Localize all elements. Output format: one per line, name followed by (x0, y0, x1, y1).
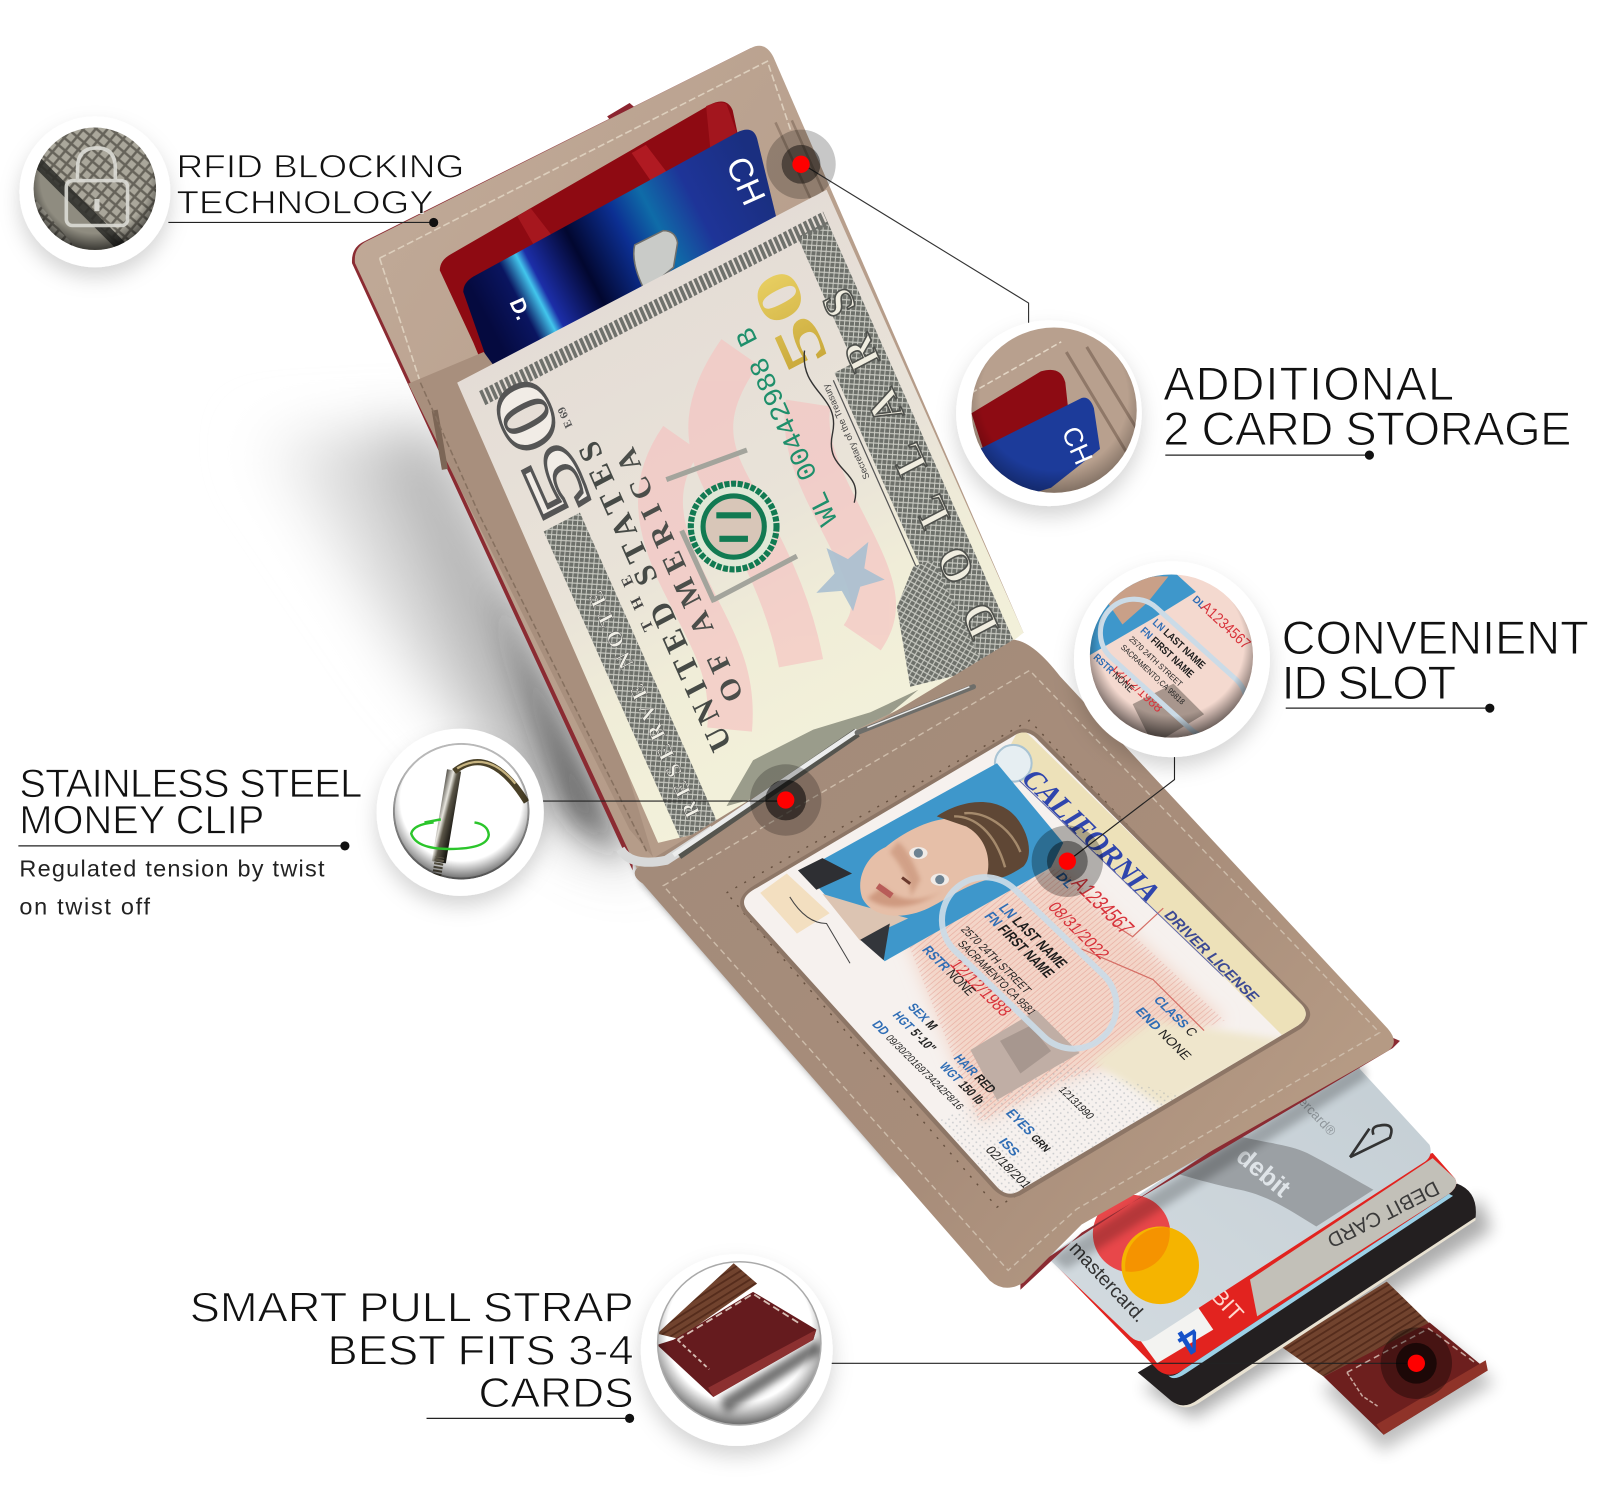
document number: DD 09/30/20169734242F8/16 (869, 1018, 969, 1112)
big corner numeral: 50 (473, 363, 608, 536)
swoosh (1177, 1135, 1373, 1227)
leader line (168, 218, 438, 227)
twist arrow (411, 822, 489, 849)
wallet: pull strap (1282, 1282, 1488, 1435)
badge (956, 320, 1143, 506)
portrait (798, 802, 1029, 960)
hotspot: money clip (750, 764, 821, 836)
first name: FN FIRST NAME (980, 910, 1058, 981)
heading line one: UNITED STATES (571, 435, 738, 758)
lower right tint (1092, 1020, 1291, 1107)
wallet: cards pulled out (1047, 1051, 1476, 1407)
weight: WGT 150 lb (936, 1060, 988, 1106)
mastercard logo (1093, 1195, 1170, 1272)
heading: SMART PULL STRAP (190, 1283, 634, 1330)
window rim (740, 729, 1310, 1198)
hotspot: ID slot (1032, 826, 1103, 897)
leader line (1066, 740, 1174, 862)
signature patch (760, 873, 830, 934)
heading: RFID BLOCKING (177, 148, 464, 185)
badge: DL (1190, 594, 1207, 611)
blue card (463, 130, 778, 373)
DL label: DL (1053, 870, 1078, 890)
cream top right band (1005, 727, 1316, 1041)
heading (1282, 612, 1589, 709)
lock icon (66, 148, 128, 226)
heading: MONEY CLIP (19, 799, 264, 843)
underline (427, 1414, 634, 1423)
debit card (1051, 1153, 1456, 1375)
debit word: debit (1231, 1142, 1296, 1203)
endorsement: END NONE (1132, 1005, 1195, 1062)
gold numeral: 50 (738, 258, 841, 383)
heading: CONVENIENT (1282, 612, 1589, 664)
hologram icon (1350, 1125, 1391, 1157)
heading: ID SLOT (1282, 657, 1456, 709)
wallet: top panel with card pockets (352, 46, 1023, 870)
right pockets (776, 120, 847, 245)
red card (440, 102, 760, 378)
pink area (898, 867, 1224, 1122)
engraved left band (544, 513, 719, 845)
network fragment: ercard® (1296, 1094, 1339, 1139)
badge: 2570 24TH STREET (1127, 635, 1184, 689)
outer stitching (663, 670, 1380, 1270)
visa patch (1140, 1307, 1213, 1363)
class: CLASS C (1151, 994, 1201, 1039)
engraved right band (834, 348, 1014, 660)
city: SACRAMENTO,CA 95818 (955, 939, 1042, 1021)
wallet: ID card in window (744, 732, 1306, 1194)
callout: smart pull strap (190, 1254, 1416, 1446)
lower pocket flap beside bill (408, 352, 653, 857)
licence number: A1234567 (1066, 873, 1140, 938)
heading: ADDITIONAL (1163, 358, 1454, 410)
heading: CARDS (479, 1369, 634, 1416)
description: Regulated tension by twist (19, 856, 325, 882)
badge (641, 1254, 833, 1446)
badge (377, 729, 544, 896)
hair colour: HAIR RED (951, 1052, 1000, 1095)
callout: additional card storage (801, 163, 1571, 506)
star (816, 542, 885, 611)
serial number: WL 00442988 B (732, 321, 845, 530)
right portrait engraving (897, 560, 985, 687)
badge: 12/12/1988 (1108, 660, 1166, 715)
treasury caption: Secretary of the Treasury (821, 382, 872, 481)
ghost photo (970, 1010, 1080, 1100)
wallet drop shadow (255, 429, 1495, 1451)
heading: BEST FITS 3-4 (328, 1326, 634, 1373)
callout: convenient ID slot (1066, 561, 1589, 862)
card text D.: D. (505, 294, 535, 324)
heading (177, 148, 464, 220)
debit card caption: DEBIT CARD (1323, 1176, 1442, 1251)
heading: STAINLESS STEEL (19, 762, 362, 806)
callout: RFID blocking technology (19, 116, 464, 267)
badge (19, 116, 170, 267)
heading (190, 1283, 634, 1416)
red map line (1082, 908, 1204, 1031)
dollars lettering: DOLLARS (813, 280, 1008, 646)
band lettering: RESERVE NOTE (584, 587, 704, 822)
issue label: ISS (995, 1136, 1023, 1158)
heading (1163, 358, 1571, 455)
card text CH: CH (718, 151, 772, 211)
seal (995, 745, 1032, 782)
height: HGT 5'-10" (889, 1009, 940, 1054)
state name: CALIFORNIA (1013, 764, 1169, 907)
money clip (620, 687, 973, 862)
last name: LN LAST NAME (995, 901, 1071, 971)
wallet: lower panel (635, 640, 1400, 1290)
stitching (380, 61, 791, 383)
badge: FN FIRST NAME (1138, 625, 1196, 680)
sex: SEX M (905, 1001, 941, 1032)
the: THE (618, 572, 657, 634)
badge: RSTR NONE (1091, 652, 1136, 695)
description: on twist off (19, 893, 150, 919)
underline (1165, 451, 1374, 460)
callout: stainless steel money clip (18, 729, 786, 919)
black card (1138, 1184, 1476, 1405)
blue letter: 4 (1170, 1318, 1209, 1364)
badge: CH (1056, 422, 1099, 469)
underline (18, 841, 349, 851)
hotspot: card storage (766, 130, 836, 199)
heading (19, 762, 362, 843)
badge (1074, 561, 1270, 757)
eye colour: EYES GRN (1002, 1107, 1055, 1155)
treasury seal (691, 484, 777, 569)
silver mastercard (1047, 1051, 1431, 1341)
top lace band (482, 219, 826, 398)
licence title: DRIVER LICENSE (1160, 909, 1263, 1005)
chip (634, 231, 678, 291)
pink security waves (660, 352, 874, 730)
shadow of panel on card (1051, 1061, 1367, 1269)
street: 2570 24TH STREET (958, 924, 1034, 995)
badge: A1234567 (1197, 599, 1254, 653)
issue date: 02/18/2016 (982, 1144, 1040, 1196)
hologram oval (924, 859, 1134, 1066)
description (19, 856, 325, 919)
birth date: 12/12/1988 (946, 955, 1017, 1019)
inner stitching (727, 720, 1310, 1207)
restrictions: RSTR NONE (918, 944, 979, 999)
card word fragment: BIT (1206, 1284, 1249, 1326)
lower dotted area (940, 1061, 1184, 1197)
underline (1286, 704, 1494, 713)
small plate mark: E 69 (556, 404, 575, 430)
lower portrait engraving (727, 690, 918, 806)
badge: SACRAMENTO,CA 95818 (1119, 643, 1187, 707)
leader line (526, 800, 786, 802)
heading: 2 CARD STORAGE (1163, 403, 1571, 455)
heading: TECHNOLOGY (177, 183, 434, 220)
heading line two: OF AMERICA (610, 442, 750, 707)
badge: LN LAST NAME (1150, 617, 1207, 672)
leader line (821, 1362, 1416, 1364)
wallet: fifty dollar bill (457, 190, 1024, 843)
audit number: 12131990 (1056, 1085, 1096, 1121)
leader line (801, 163, 1029, 337)
hotspot: pull strap (1381, 1328, 1452, 1399)
columns (666, 450, 797, 602)
expiry: 08/31/2022 (1044, 899, 1114, 962)
photo background (803, 763, 1063, 961)
mastercard word: mastercard. (1065, 1237, 1150, 1327)
